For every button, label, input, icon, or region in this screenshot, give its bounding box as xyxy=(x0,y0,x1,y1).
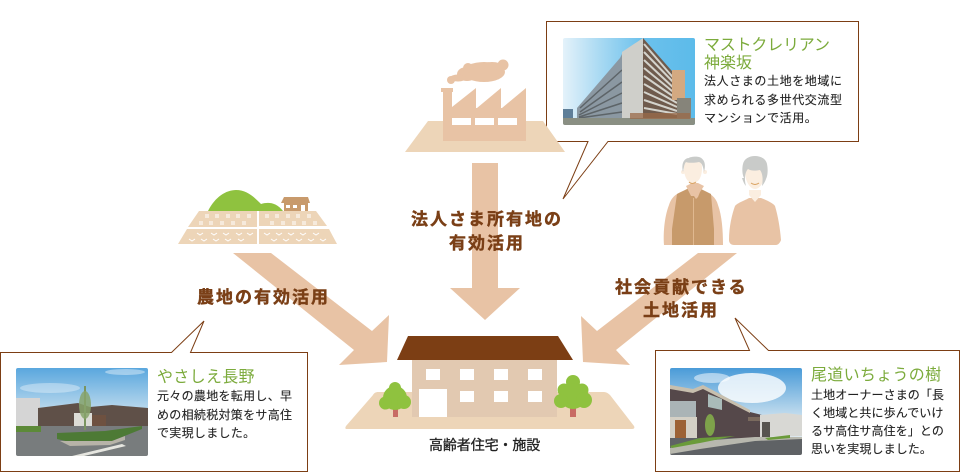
description: 法人さまの土地を地域に xyxy=(704,74,843,88)
icon: elderly couple xyxy=(664,156,781,245)
label: social land use: 社会貢献できる xyxy=(615,277,748,297)
description: 思いを実現しました。 xyxy=(811,442,932,456)
panel: Yasashie Nagano xyxy=(0,321,308,472)
icon: tree right xyxy=(554,375,592,417)
description: めの相続税対策をサ高住 xyxy=(157,408,292,422)
label: farmland: 農地の有効活用 xyxy=(197,288,330,307)
description: マンションで活用。 xyxy=(704,111,817,125)
description: く地域と共に歩んでいけ xyxy=(811,405,944,420)
arrow: right to centre xyxy=(581,253,737,365)
description xyxy=(157,389,292,440)
title: マストクレリアン xyxy=(704,36,830,54)
description: るサ高住サ高住を」との xyxy=(811,424,944,438)
icon: senior housing building xyxy=(345,336,634,429)
label: corporate land: 法人さま所有地の xyxy=(411,210,563,229)
title: やさしえ長野 xyxy=(157,368,255,386)
icon: tree left xyxy=(379,382,411,417)
arrow: left to centre xyxy=(233,253,389,365)
photo: apartment xyxy=(563,38,695,125)
title: 尾道いちょうの樹 xyxy=(811,366,941,384)
description: 土地オーナーさまの「長 xyxy=(811,388,944,402)
description: 求められる多世代交流型 xyxy=(704,93,843,107)
label: corporate land: 有効活用 xyxy=(449,234,525,253)
icon: factory xyxy=(405,60,565,152)
label: social land use: 土地活用 xyxy=(643,301,719,320)
description: で実現しました。 xyxy=(157,426,255,440)
label: social land use xyxy=(615,277,748,320)
description xyxy=(811,388,944,456)
caption: senior housing: 高齢者住宅・施設 xyxy=(429,437,540,453)
photo: care facility xyxy=(16,368,148,456)
icon: farmland xyxy=(178,190,337,244)
photo: care residence xyxy=(670,368,802,455)
panel: Mast Clerian Kagurazaka xyxy=(546,22,858,199)
description xyxy=(704,74,843,125)
title xyxy=(704,36,830,72)
panel: Onomichi Icho no Ki xyxy=(656,318,960,472)
title: 神楽坂 xyxy=(704,54,752,72)
arrow: top to centre xyxy=(450,163,520,320)
description: 元々の農地を転用し、早 xyxy=(157,389,292,403)
label: corporate land xyxy=(411,210,563,253)
